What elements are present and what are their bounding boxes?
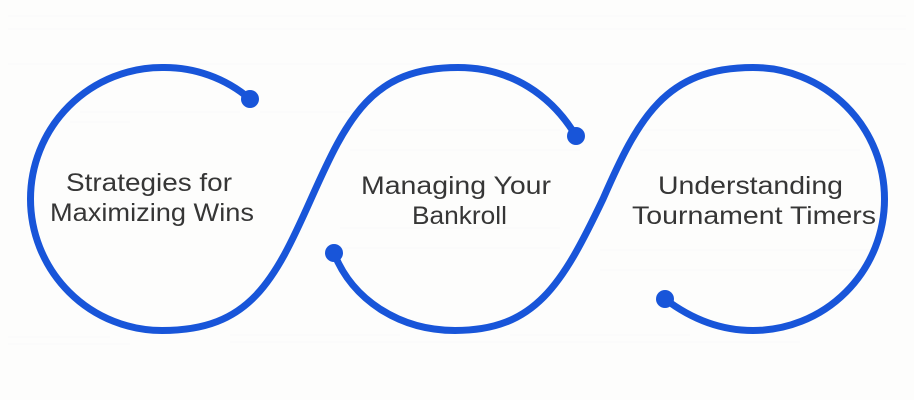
label: bankroll: Managing Your — [361, 172, 551, 200]
label: timers: Understanding — [658, 172, 843, 200]
dot: end of second loop — [567, 127, 585, 145]
label: timers: Tournament Timers — [632, 202, 876, 230]
label: strategies — [50, 169, 254, 227]
label: strategies: Maximizing Wins — [50, 199, 254, 227]
label: bankroll — [361, 172, 551, 230]
label: timers — [632, 172, 876, 230]
curve: second loop into third — [334, 68, 884, 330]
curve: first loop into second — [31, 67, 576, 331]
dot: start of second loop — [325, 244, 343, 262]
label: bankroll: Bankroll — [412, 202, 507, 230]
dot: end of third loop — [656, 290, 674, 308]
label: strategies: Strategies for — [66, 169, 232, 197]
dot: end of first loop — [241, 90, 259, 108]
